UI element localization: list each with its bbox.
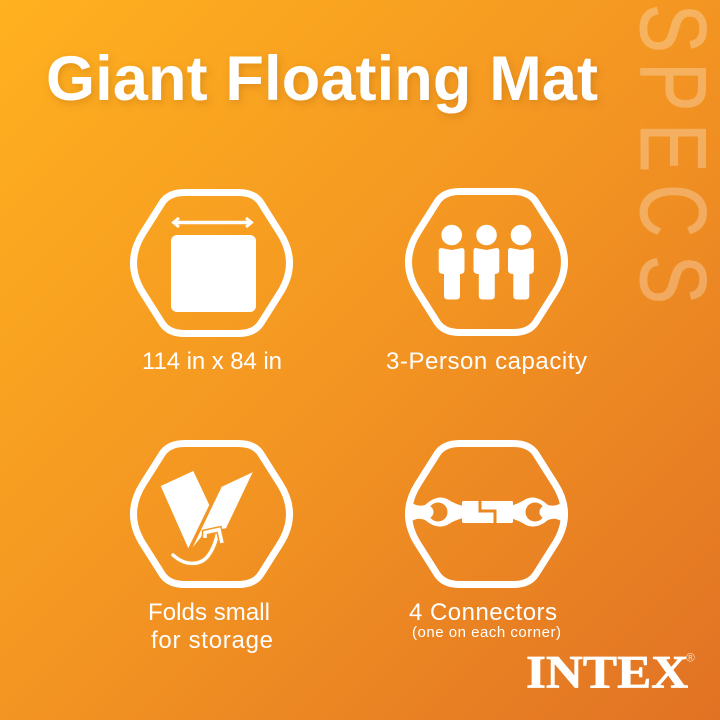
panel: folding (134, 444, 290, 654)
panel: capacity (386, 192, 587, 375)
label: dimensions: 114 in x 84 in (142, 348, 282, 375)
icon: three people (408, 192, 564, 332)
label: connectors: 4 Connectors (409, 599, 557, 626)
icon: mat size (134, 192, 290, 334)
label: connector note: (one on each corner) (412, 624, 561, 641)
label: for storage: for storage (151, 627, 273, 654)
logo: INTEX: ® (686, 650, 695, 664)
label: folds small: Folds small (148, 599, 270, 626)
label: capacity: 3-Person capacity (386, 348, 587, 375)
panel: connectors (405, 444, 568, 641)
icon: connector clasp (405, 444, 568, 584)
title: Giant Floating Mat (46, 44, 598, 114)
panel: dimensions (134, 192, 290, 375)
icon: folded mat (134, 444, 290, 584)
logo: INTEX: INTEX (526, 645, 688, 698)
